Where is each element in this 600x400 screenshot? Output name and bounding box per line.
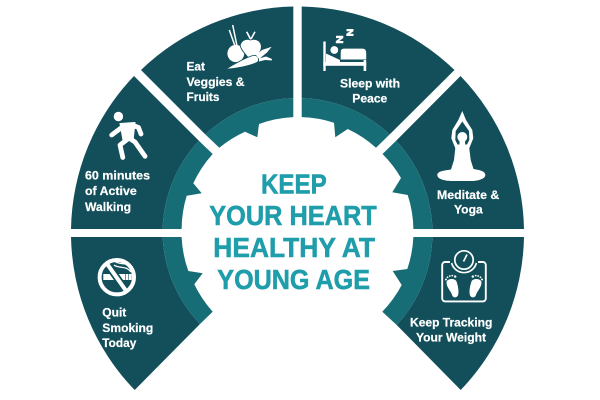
title — [209, 168, 377, 295]
label: Sleep with — [340, 76, 400, 90]
icon: walking person — [112, 112, 145, 158]
label — [186, 60, 245, 104]
panel: keep tracking your weight — [382, 237, 524, 390]
label — [410, 316, 492, 345]
label — [102, 306, 153, 350]
label: Eat — [186, 60, 205, 74]
label: Your Weight — [416, 331, 486, 345]
segment background — [396, 76, 524, 229]
panel: meditate and yoga — [382, 76, 524, 229]
ring segment — [382, 141, 432, 229]
segment background — [71, 76, 199, 229]
title: YOUNG AGE — [217, 264, 370, 295]
icon: weighing scale with feet — [442, 246, 486, 301]
label: Yoga — [454, 202, 483, 216]
title: KEEP — [261, 168, 327, 199]
segment background — [71, 237, 200, 390]
label: Walking — [85, 200, 131, 214]
panel: eat veggies and fruits — [141, 6, 293, 148]
label: Quit — [102, 306, 126, 320]
label: of Active — [85, 184, 137, 198]
ring segment — [163, 141, 213, 229]
panel: 60 minutes of active walking — [71, 76, 213, 229]
icon: vegetables — [226, 25, 272, 69]
panel: quit smoking today — [71, 237, 213, 390]
panel: sleep with peace — [302, 6, 454, 148]
icon: person meditating — [437, 111, 485, 181]
label — [437, 188, 499, 216]
label — [85, 168, 150, 214]
label: Veggies & — [186, 75, 245, 89]
label: Keep Tracking — [410, 316, 492, 330]
title: HEALTHY AT — [213, 232, 375, 263]
ring segment — [302, 98, 390, 148]
label: 60 minutes — [85, 168, 150, 182]
label — [340, 76, 400, 105]
ring segment — [205, 98, 293, 148]
label: Peace — [352, 91, 388, 105]
title: YOUR HEART — [209, 200, 377, 231]
segment background — [302, 6, 454, 134]
label: Fruits — [186, 90, 220, 104]
label: Today — [102, 336, 137, 350]
label: Meditate & — [437, 188, 499, 202]
icon: no smoking sign — [100, 260, 134, 294]
segment background — [141, 6, 293, 134]
icon: person sleeping in bed — [323, 29, 366, 71]
label: Smoking — [102, 321, 153, 335]
segment background — [397, 237, 524, 390]
ring segment — [382, 237, 432, 325]
ring segment — [163, 237, 213, 324]
